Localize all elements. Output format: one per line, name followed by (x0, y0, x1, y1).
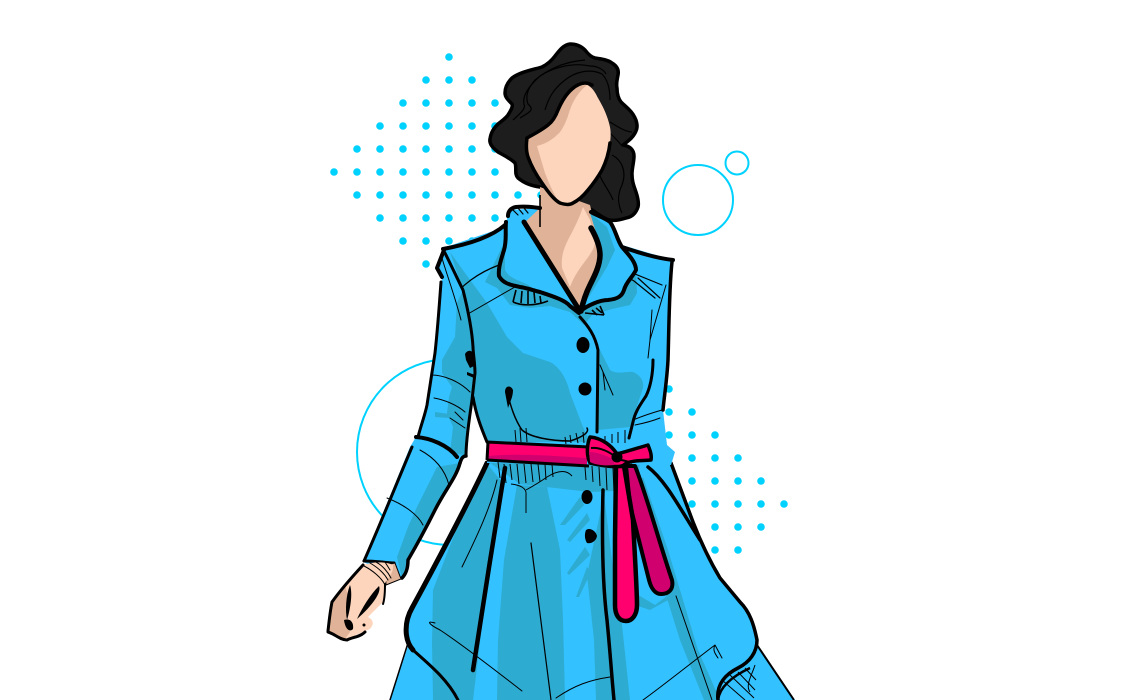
outline circles (357, 152, 748, 545)
buttons (576, 337, 597, 543)
left sleeve (363, 250, 475, 578)
underskirt left (390, 640, 460, 700)
bodice shading (450, 252, 590, 442)
sleeve shading (442, 290, 475, 455)
bodice outline (443, 225, 673, 442)
underskirt right (715, 642, 795, 700)
neck highlight (562, 207, 595, 287)
collar left inner shading (499, 245, 533, 288)
belt with bow and ties (487, 437, 672, 621)
face outline (526, 83, 610, 204)
neck (523, 187, 600, 312)
gathers (498, 428, 625, 513)
dot pattern: upper left diamond (330, 53, 545, 268)
finger marks (346, 585, 351, 620)
hair (490, 44, 638, 220)
bodice shading right of placket (597, 350, 643, 430)
palm (328, 562, 393, 640)
collar (498, 207, 637, 313)
bow (587, 437, 651, 467)
collar shadow (485, 247, 637, 325)
bow shadow (589, 452, 614, 465)
hand (328, 562, 401, 640)
hand shadow (329, 585, 350, 639)
face (526, 83, 611, 204)
skirt outline (390, 463, 757, 700)
skirt shading (432, 463, 720, 700)
hair strands (513, 60, 632, 213)
cuff skin (385, 563, 401, 585)
shoulder pleats (513, 290, 604, 315)
collar outline (499, 207, 636, 313)
face shading (526, 85, 587, 199)
waist dart (505, 386, 513, 408)
skirt (390, 463, 757, 700)
tie back (626, 466, 672, 594)
bodice (443, 213, 675, 513)
sleeve gathers (465, 351, 475, 378)
dot pattern: lower right diamond (665, 385, 788, 577)
skirt fold hatching right (718, 665, 756, 700)
collar left (498, 208, 578, 308)
sleeve outline (364, 250, 475, 578)
tie front (615, 466, 637, 621)
belt band (487, 443, 587, 465)
collar right (580, 213, 637, 311)
collar inner shading (580, 213, 615, 311)
